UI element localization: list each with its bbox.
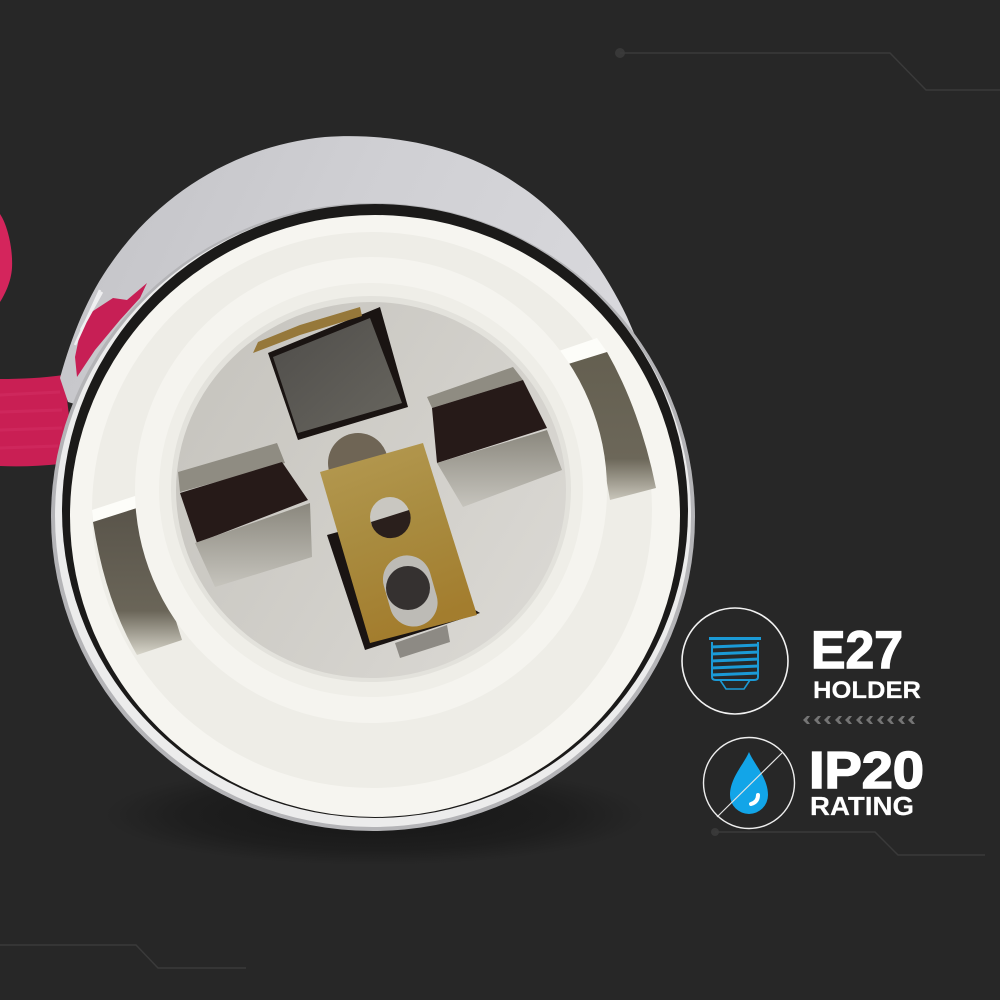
left bayonet ledge bbox=[92, 495, 142, 522]
text: E27 HOLDER: HOLDER bbox=[813, 677, 921, 704]
circuit line: bottom right bbox=[711, 828, 985, 855]
text: IP20 RATING: RATING bbox=[810, 791, 914, 821]
bottom metal tab bbox=[395, 625, 450, 658]
floor shadow bbox=[105, 765, 645, 865]
chevron divider bbox=[803, 716, 915, 724]
chrome highlight streaks bbox=[75, 290, 102, 345]
text: IP20 RATING: IP20 bbox=[809, 742, 924, 800]
text: E27 HOLDER: E27 bbox=[811, 621, 903, 680]
right contact slot bbox=[427, 367, 562, 507]
socket interior bbox=[170, 295, 570, 685]
circuit line: top right bbox=[615, 48, 1000, 90]
plate slot hole bbox=[383, 555, 438, 626]
inner collar bbox=[135, 257, 607, 723]
lamp holder bbox=[51, 136, 695, 831]
text: E27 HOLDER bbox=[811, 621, 921, 704]
chrome front rim bbox=[51, 203, 695, 831]
bottom contact well bbox=[327, 530, 480, 650]
left contact slot bbox=[178, 443, 312, 587]
right bayonet ledge bbox=[553, 338, 607, 365]
dark gap ring bbox=[62, 204, 688, 818]
white face bbox=[70, 215, 680, 817]
centre recess bbox=[328, 433, 386, 470]
icon: E27 bulb base bbox=[682, 608, 788, 714]
cable reflection in chrome bbox=[75, 283, 147, 377]
circuit line: bottom left bbox=[0, 945, 246, 968]
left bayonet slot bbox=[93, 507, 182, 655]
plate round hole bbox=[370, 497, 411, 538]
red cable bbox=[0, 214, 72, 466]
top contact well bbox=[268, 307, 408, 440]
chrome body bbox=[60, 136, 650, 500]
brass contact plate bbox=[320, 443, 477, 643]
icon: no water drop bbox=[704, 738, 794, 828]
right bayonet slot bbox=[565, 352, 656, 500]
recessed face band bbox=[92, 232, 652, 788]
top brass strip bbox=[253, 307, 362, 353]
text: IP20 RATING bbox=[809, 742, 924, 821]
